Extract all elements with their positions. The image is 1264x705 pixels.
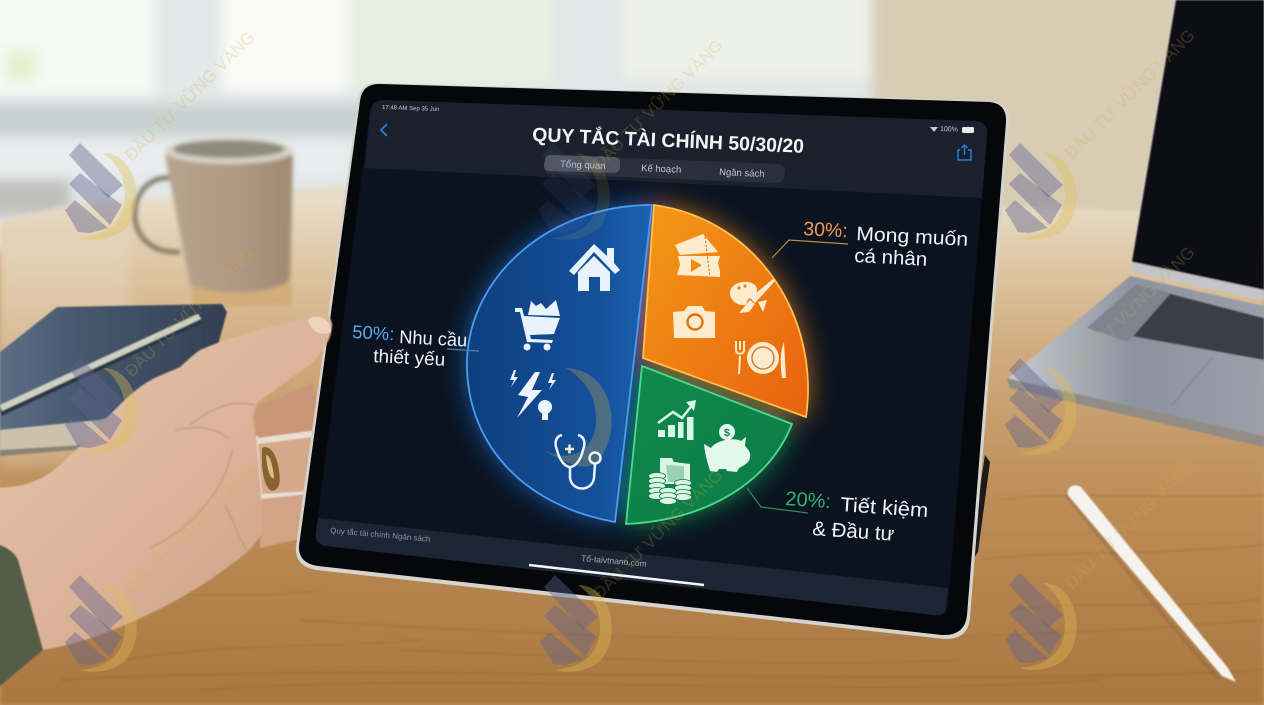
watermark: right top xyxy=(1005,143,1077,240)
label: 30% wants: Mong muốn xyxy=(856,223,969,251)
title: QUY TẮC TÀI CHÍNH 50/30/20 xyxy=(532,122,805,158)
icon: house xyxy=(569,244,620,291)
icon: piggy bank xyxy=(704,424,750,472)
watermark: left bottom xyxy=(65,575,137,672)
sleeve xyxy=(0,543,43,690)
watermark text group: ĐẦU TƯ VỮNG VÀNG xyxy=(589,466,727,603)
status bar: 100% xyxy=(940,126,958,134)
notebook and pencil xyxy=(0,304,227,456)
pie slice: 20% savings xyxy=(626,366,792,524)
status bar: 17:48 AM Sep 35 Jun xyxy=(382,105,439,113)
label: 20% savings xyxy=(747,488,929,546)
icon: shopping cart xyxy=(515,300,560,350)
watermark text group: ĐẦU TƯ VỮNG VÀNG xyxy=(121,244,259,381)
label: 20% savings: & Đầu tư xyxy=(812,518,895,546)
watermark: left middle xyxy=(65,358,137,455)
watermark: left top xyxy=(65,143,137,240)
watermark: tablet top xyxy=(538,143,610,240)
watermark text group: ĐẦU TƯ VỮNG VÀNG xyxy=(589,36,727,173)
icon: stethoscope xyxy=(556,435,600,488)
hand: fingers behind tablet xyxy=(254,383,318,548)
background: window and wall xyxy=(0,0,1264,250)
label: 50% needs: Nhu cầu xyxy=(399,326,468,351)
icon: movie tickets xyxy=(675,234,720,277)
screen footer band xyxy=(316,518,948,615)
label: 30% wants: 30%: xyxy=(803,218,848,242)
laptop xyxy=(1006,0,1264,447)
watermark text group: ĐẦU TƯ VỮNG VÀNG xyxy=(1061,26,1199,163)
status bar xyxy=(382,105,974,134)
label: 50% needs: 50%: xyxy=(352,321,395,344)
watermark text group xyxy=(121,26,1199,603)
pie slice: 30% wants xyxy=(643,205,808,417)
tablet screen xyxy=(316,100,987,615)
tablet stand xyxy=(968,455,990,566)
segmented tabs: Ngân sách xyxy=(719,167,765,180)
pie glow xyxy=(467,205,808,524)
segmented tabs xyxy=(544,155,785,183)
tablet body xyxy=(296,83,1009,639)
watermark: right middle xyxy=(1005,358,1077,455)
label: 20% savings: Tiết kiệm xyxy=(840,494,929,522)
label: 50% needs: thiết yếu xyxy=(373,345,446,370)
segmented tabs: Kế hoạch xyxy=(641,163,681,176)
watermark: bottom centre xyxy=(540,575,612,672)
icon: growth chart xyxy=(658,400,696,440)
share icon xyxy=(958,145,971,160)
segmented tabs: Tổng quan xyxy=(560,159,606,172)
hand xyxy=(0,313,332,650)
label: 30% wants xyxy=(772,218,969,271)
watermark text group: ĐẦU TƯ VỮNG VÀNG xyxy=(1061,243,1199,380)
footer url: Tổ-taivtnano.com xyxy=(581,553,647,569)
icon: palette and brush xyxy=(730,279,775,313)
label: 30% wants: cá nhân xyxy=(854,245,928,271)
icon: piggy bank: $ xyxy=(724,427,730,439)
home indicator xyxy=(529,565,704,585)
watermark: pie crescent xyxy=(540,368,612,467)
coffee mug xyxy=(135,138,293,308)
watermark: right bottom xyxy=(1005,573,1077,670)
pie slice: 50% needs xyxy=(467,205,652,522)
wedding ring xyxy=(262,447,280,491)
watermark text group: ĐẦU TƯ VỮNG VÀNG xyxy=(121,28,259,165)
footer text: Quy tắc tài chính Ngân sách xyxy=(330,526,431,544)
icon: electricity xyxy=(510,370,556,420)
watermark text group: ĐẦU TƯ VỮNG VÀNG xyxy=(121,461,259,598)
stylus pen xyxy=(1066,485,1236,682)
watermark text group: ĐẦU TƯ VỮNG VÀNG xyxy=(1061,456,1199,593)
label: 50% needs xyxy=(352,321,479,370)
icon: camera xyxy=(673,306,715,338)
icon: plate and cutlery xyxy=(736,341,786,378)
label: 20% savings: 20%: xyxy=(785,488,832,513)
back chevron xyxy=(381,124,387,136)
background: wooden table xyxy=(0,185,1264,705)
screen header band xyxy=(365,100,987,198)
icon: coins and folder xyxy=(648,458,692,504)
